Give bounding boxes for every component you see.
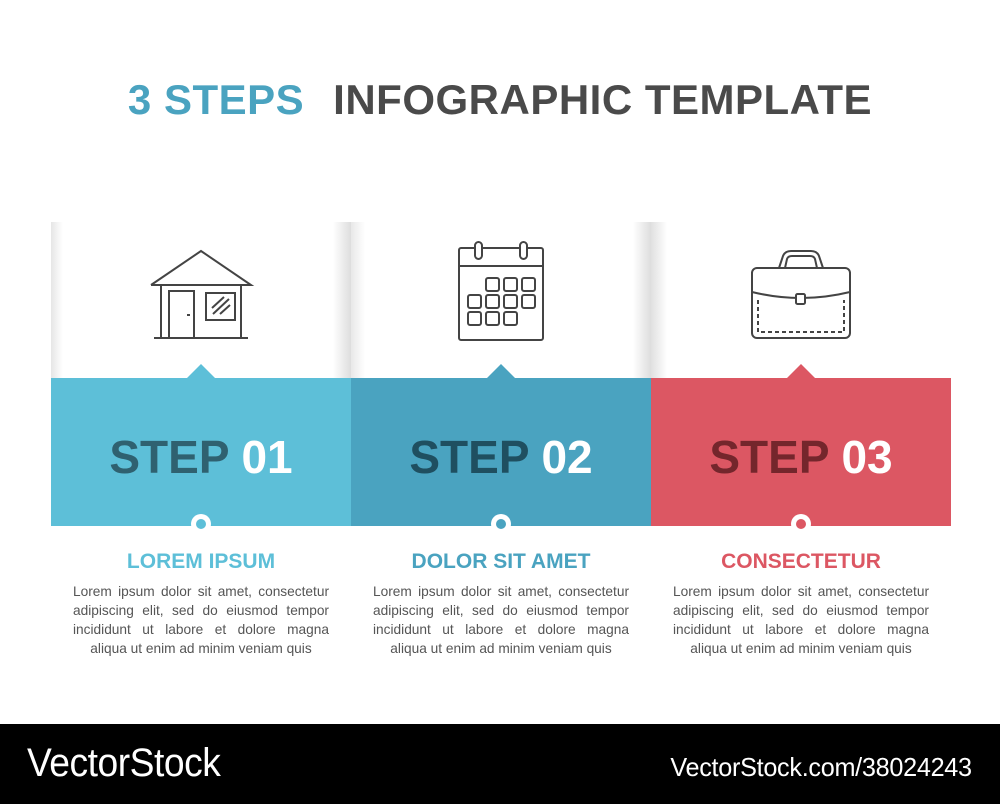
- title: 3 STEPS INFOGRAPHIC TEMPLATE: [128, 76, 872, 123]
- heading: DOLOR SIT AMET: [412, 550, 590, 573]
- heading: CONSECTETUR: [721, 550, 881, 573]
- step label: STEP 02: [409, 431, 593, 483]
- panel: step 1: [51, 222, 351, 656]
- panel: step 3: [651, 222, 951, 656]
- icon: house: [150, 250, 254, 339]
- text block: Lorem ipsum dolor sit amet, consectetur adipiscing elit, sed do eiusmod tempor incididunt ut labore et dolore magna aliqua ut enim ad minim veniam quis: [673, 584, 929, 656]
- notch: [487, 364, 515, 378]
- notch: [187, 364, 215, 378]
- white top with shadow: [51, 222, 351, 378]
- marker dot: [491, 514, 511, 534]
- colored band: [651, 378, 951, 526]
- colored band: [351, 378, 651, 526]
- notch: [787, 364, 815, 378]
- white top: [651, 222, 951, 378]
- footer bar: [0, 724, 1000, 804]
- white top: [351, 222, 651, 378]
- heading: LOREM IPSUM: [127, 550, 275, 573]
- colored band: [51, 378, 351, 526]
- icon: calendar: [458, 241, 544, 341]
- footer logo: VectorStock: [27, 741, 220, 785]
- text block: Lorem ipsum dolor sit amet, consectetur adipiscing elit, sed do eiusmod tempor incididunt ut labore et dolore magna aliqua ut enim ad minim veniam quis: [73, 584, 329, 656]
- icon: briefcase: [751, 250, 851, 339]
- panel: step 2: [351, 222, 651, 656]
- step label: STEP 01: [109, 431, 293, 483]
- marker dot: [791, 514, 811, 534]
- footer id: VectorStock.com/38024243: [671, 752, 972, 782]
- text block: Lorem ipsum dolor sit amet, consectetur adipiscing elit, sed do eiusmod tempor incididunt ut labore et dolore magna aliqua ut enim ad minim veniam quis: [373, 584, 629, 656]
- marker dot: [191, 514, 211, 534]
- step label: STEP 03: [709, 431, 893, 483]
